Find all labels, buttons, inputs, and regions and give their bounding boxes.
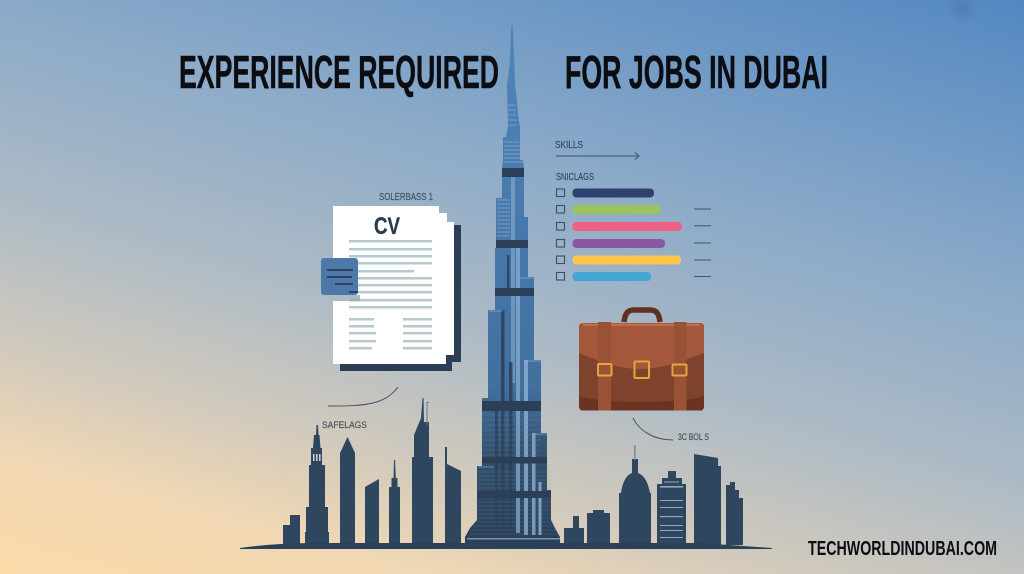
dome antenna (634, 445, 636, 460)
arrow (556, 152, 639, 160)
label: document: SOLERBASS 1 (379, 192, 433, 203)
dashes (694, 209, 711, 276)
tower dark columns (495, 255, 512, 536)
tower dark bands (477, 168, 551, 498)
left tower windows (313, 454, 321, 461)
CV document (321, 206, 461, 371)
antenna (426, 402, 429, 425)
briefcase icon (579, 310, 704, 410)
tower fine lines (478, 105, 547, 467)
skyline right (564, 445, 743, 545)
white page (333, 206, 454, 364)
curve connector: briefcase (633, 418, 673, 440)
skills heading: SKILLS (555, 139, 583, 151)
bottom shade (579, 396, 704, 410)
handle (624, 310, 660, 322)
title: EXPERIENCE REQUIRED (179, 46, 499, 98)
tower base line (467, 538, 560, 540)
ground line (240, 543, 772, 549)
blue note icon (321, 258, 360, 301)
CV heading: CV (374, 213, 400, 240)
curve connector: document (328, 387, 398, 406)
Burj Khalifa tower (465, 25, 560, 545)
document text lines (349, 240, 432, 350)
skyline left (283, 398, 461, 545)
striped building lines (660, 482, 683, 538)
title: FOR JOBS IN DUBAI (565, 46, 828, 98)
body (579, 323, 704, 410)
label: briefcase: 3C BOL S (678, 432, 709, 443)
flap (579, 323, 704, 369)
skills bar list (556, 188, 711, 281)
buckles (598, 362, 686, 378)
checkboxes (556, 189, 564, 280)
corner smudge (946, 0, 978, 25)
subheading: SNICLAGS (556, 171, 594, 183)
page shadow (340, 225, 461, 371)
tower light stripes (511, 177, 542, 535)
label: skyline: SAFELAGS (322, 420, 367, 431)
straps (598, 322, 611, 410)
bars (572, 188, 654, 198)
